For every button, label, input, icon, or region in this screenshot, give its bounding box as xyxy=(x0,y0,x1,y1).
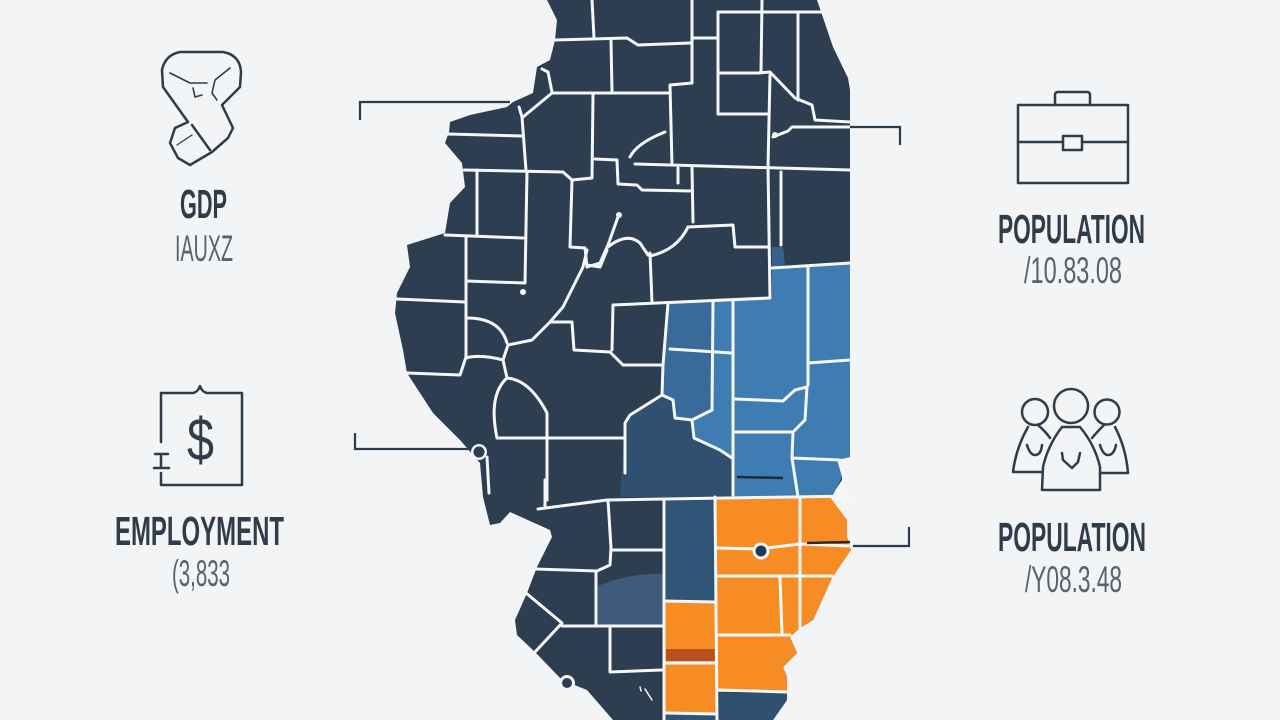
lighter blue strip xyxy=(692,300,733,458)
panel: employment xyxy=(115,386,284,594)
icon: ribbon xyxy=(162,52,241,165)
heading: population: POPULATION xyxy=(998,514,1146,560)
marker: south coast xyxy=(559,675,575,691)
light blue counties xyxy=(733,264,850,497)
value: employment: (3,833 xyxy=(172,553,230,594)
leader line: bottom left xyxy=(355,433,470,449)
black bar in blue county xyxy=(737,477,783,478)
panel: population bottom xyxy=(998,389,1146,600)
leader line: top left xyxy=(360,102,510,120)
map base: dark counties xyxy=(395,0,850,720)
marker: orange county xyxy=(752,542,770,560)
orange column xyxy=(665,602,716,713)
blue tab county xyxy=(772,247,785,268)
heading: employment: EMPLOYMENT xyxy=(115,508,284,554)
marker: left coast xyxy=(471,444,487,460)
dark red band xyxy=(666,649,715,661)
dark blue counties xyxy=(620,395,733,497)
black bar in orange county xyxy=(807,542,850,543)
value: population: /Y08.3.48 xyxy=(1025,559,1122,600)
icon: three people xyxy=(1013,389,1128,490)
shaded county xyxy=(598,574,663,625)
heading: GDP: GDP xyxy=(180,181,227,227)
heading: population: POPULATION xyxy=(998,206,1145,252)
small border blobs xyxy=(520,132,778,295)
icon: dollar document xyxy=(154,386,242,485)
orange counties xyxy=(716,497,851,692)
mid blue counties xyxy=(662,302,733,458)
value: GDP: IAUXZ xyxy=(175,228,233,269)
leader line: top right xyxy=(850,127,900,145)
icon: briefcase xyxy=(1018,92,1128,183)
county borders xyxy=(397,0,850,720)
bottom blue county strip xyxy=(665,715,716,720)
bottom blue county xyxy=(719,693,787,720)
value: population: /10.83.08 xyxy=(1024,250,1122,291)
blue column xyxy=(666,499,715,601)
panel: GDP xyxy=(162,52,241,269)
map of counties xyxy=(395,0,851,720)
icon: dollar document: $ xyxy=(187,406,214,473)
leader line: bottom right xyxy=(853,527,909,546)
panel: population top xyxy=(998,92,1145,291)
